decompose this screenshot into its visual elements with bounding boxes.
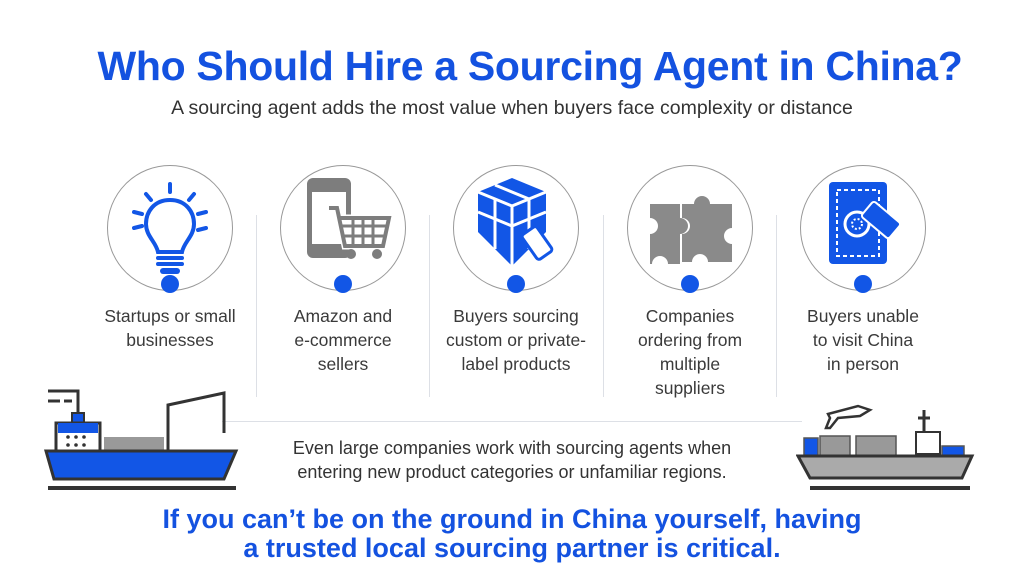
icon: cargo ship left: [44, 390, 238, 480]
label: label products: [462, 354, 570, 374]
label: [294, 306, 392, 374]
body text: [293, 438, 731, 482]
marker dot: [161, 275, 179, 293]
icon: passport tag: [800, 165, 926, 291]
icon: light bulb: [107, 165, 233, 291]
label: businesses: [126, 330, 214, 350]
label: Companies: [646, 306, 734, 326]
subtitle: A sourcing agent adds the most value when buyers face complexity or distance: [171, 97, 853, 119]
panel: amazon: [280, 165, 406, 374]
title: Who Should Hire a Sourcing Agent in China?: [97, 43, 963, 89]
icon: container ship and plane: [796, 404, 974, 480]
conclusion: [162, 504, 862, 563]
label: [807, 306, 919, 374]
label: e-commerce: [294, 330, 392, 350]
label: [638, 306, 742, 398]
label: Buyers unable: [807, 306, 919, 326]
label: Amazon and: [294, 306, 392, 326]
label: Startups or small: [104, 306, 236, 326]
label: [104, 306, 236, 350]
label: custom or private-: [446, 330, 586, 350]
icon: puzzle: [627, 165, 753, 291]
body text: Even large companies work with sourcing agents when: [293, 438, 731, 458]
label: sellers: [318, 354, 368, 374]
conclusion: a trusted local sourcing partner is critical.: [243, 533, 781, 563]
panel: custom products: [446, 165, 586, 374]
panel: multiple suppliers: [627, 165, 753, 398]
label: to visit China: [813, 330, 913, 350]
marker dot: [507, 275, 525, 293]
body text: entering new product categories or unfamiliar regions.: [297, 462, 727, 482]
icon: cube with tag: [453, 165, 579, 291]
icon: phone cart: [280, 165, 406, 291]
label: [446, 306, 586, 374]
label: ordering from: [638, 330, 742, 350]
label: multiple: [660, 354, 720, 374]
conclusion: If you can’t be on the ground in China yourself, having: [162, 504, 862, 534]
marker dot: [334, 275, 352, 293]
panel: startups: [104, 165, 236, 350]
label: suppliers: [655, 378, 725, 398]
label: in person: [827, 354, 899, 374]
panel: cannot visit: [800, 165, 926, 374]
label: Buyers sourcing: [453, 306, 579, 326]
marker dot: [681, 275, 699, 293]
marker dot: [854, 275, 872, 293]
